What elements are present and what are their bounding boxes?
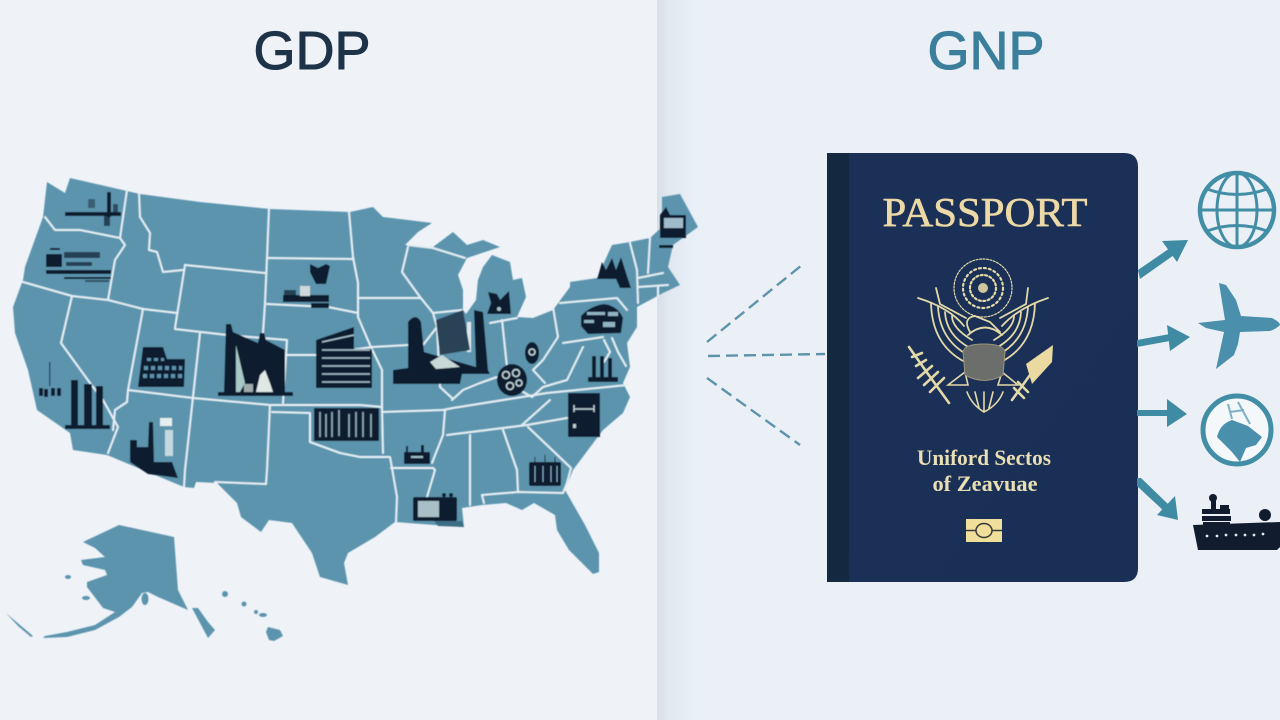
left olive branch [909, 347, 949, 403]
contiguous states landmass [13, 178, 698, 585]
arrow to globe [1138, 240, 1188, 279]
panel fold shadow [657, 0, 697, 720]
icon: Oregon landmark [46, 248, 111, 282]
shield [963, 344, 1005, 380]
passport title: PASSPORT [882, 189, 1088, 235]
tail feathers [948, 372, 1018, 412]
panel: GNP background [657, 0, 1280, 720]
icon: Michigan mark [487, 291, 511, 314]
icon: Washington landmark [65, 192, 121, 226]
seal sunburst [954, 259, 1012, 317]
right wing [994, 288, 1048, 362]
heading: GNP: GNP [927, 21, 1045, 81]
passport country text [917, 445, 1051, 496]
passport country text: of Zeavuae [932, 471, 1038, 496]
icon: Virginia columns [588, 356, 618, 382]
icon: ship [1193, 494, 1280, 550]
left wing [918, 288, 972, 362]
icon: South Dakota landmark [283, 264, 330, 308]
Alaska panhandle [192, 608, 215, 638]
icon: Illinois factory [393, 310, 490, 384]
icon: Arkansas factory [404, 445, 430, 464]
arrow to plane [1137, 325, 1190, 351]
icon: globe [1200, 173, 1274, 247]
panel: GDP background [0, 0, 657, 720]
icon: Maine landmark [659, 207, 686, 248]
eagle head [967, 316, 1002, 335]
emblem: eagle seal [909, 259, 1053, 412]
heading: GDP: GDP [253, 21, 371, 81]
passport spine [827, 153, 849, 582]
icon: Pennsylvania landmark [581, 304, 623, 334]
Alaska [43, 525, 188, 638]
passport country text: Uniford Sectos [917, 445, 1051, 470]
dashed connector lines [707, 265, 825, 445]
Lake Michigan highlight [467, 322, 471, 352]
icon: Louisiana screen [413, 493, 464, 527]
map: United States [6, 178, 698, 641]
passport [827, 153, 1138, 582]
Kodiak and Aleutian islands [6, 575, 148, 637]
Hawaii [222, 591, 283, 641]
icon: California skyline [39, 362, 110, 429]
icon: North Carolina panel [568, 393, 600, 437]
icon: Kansas office tower [316, 327, 372, 388]
icon: Utah colosseum [138, 347, 185, 387]
icon: New York skyline [597, 257, 631, 288]
icon: Georgia columns [529, 455, 561, 486]
right arrows sprig [1012, 375, 1030, 400]
arrow to ship [1137, 478, 1178, 520]
icon: earth [1203, 396, 1271, 464]
passport cover [827, 153, 1138, 582]
passport chip symbol [966, 519, 1002, 542]
icon: Arizona factory [130, 418, 178, 478]
icon: Colorado building [218, 324, 293, 396]
state borders [23, 190, 668, 522]
arrow to earth [1137, 399, 1187, 427]
icon: Oklahoma colonnade [314, 408, 379, 441]
icon: airplane [1198, 283, 1280, 369]
icon: Ohio dials [497, 342, 539, 396]
